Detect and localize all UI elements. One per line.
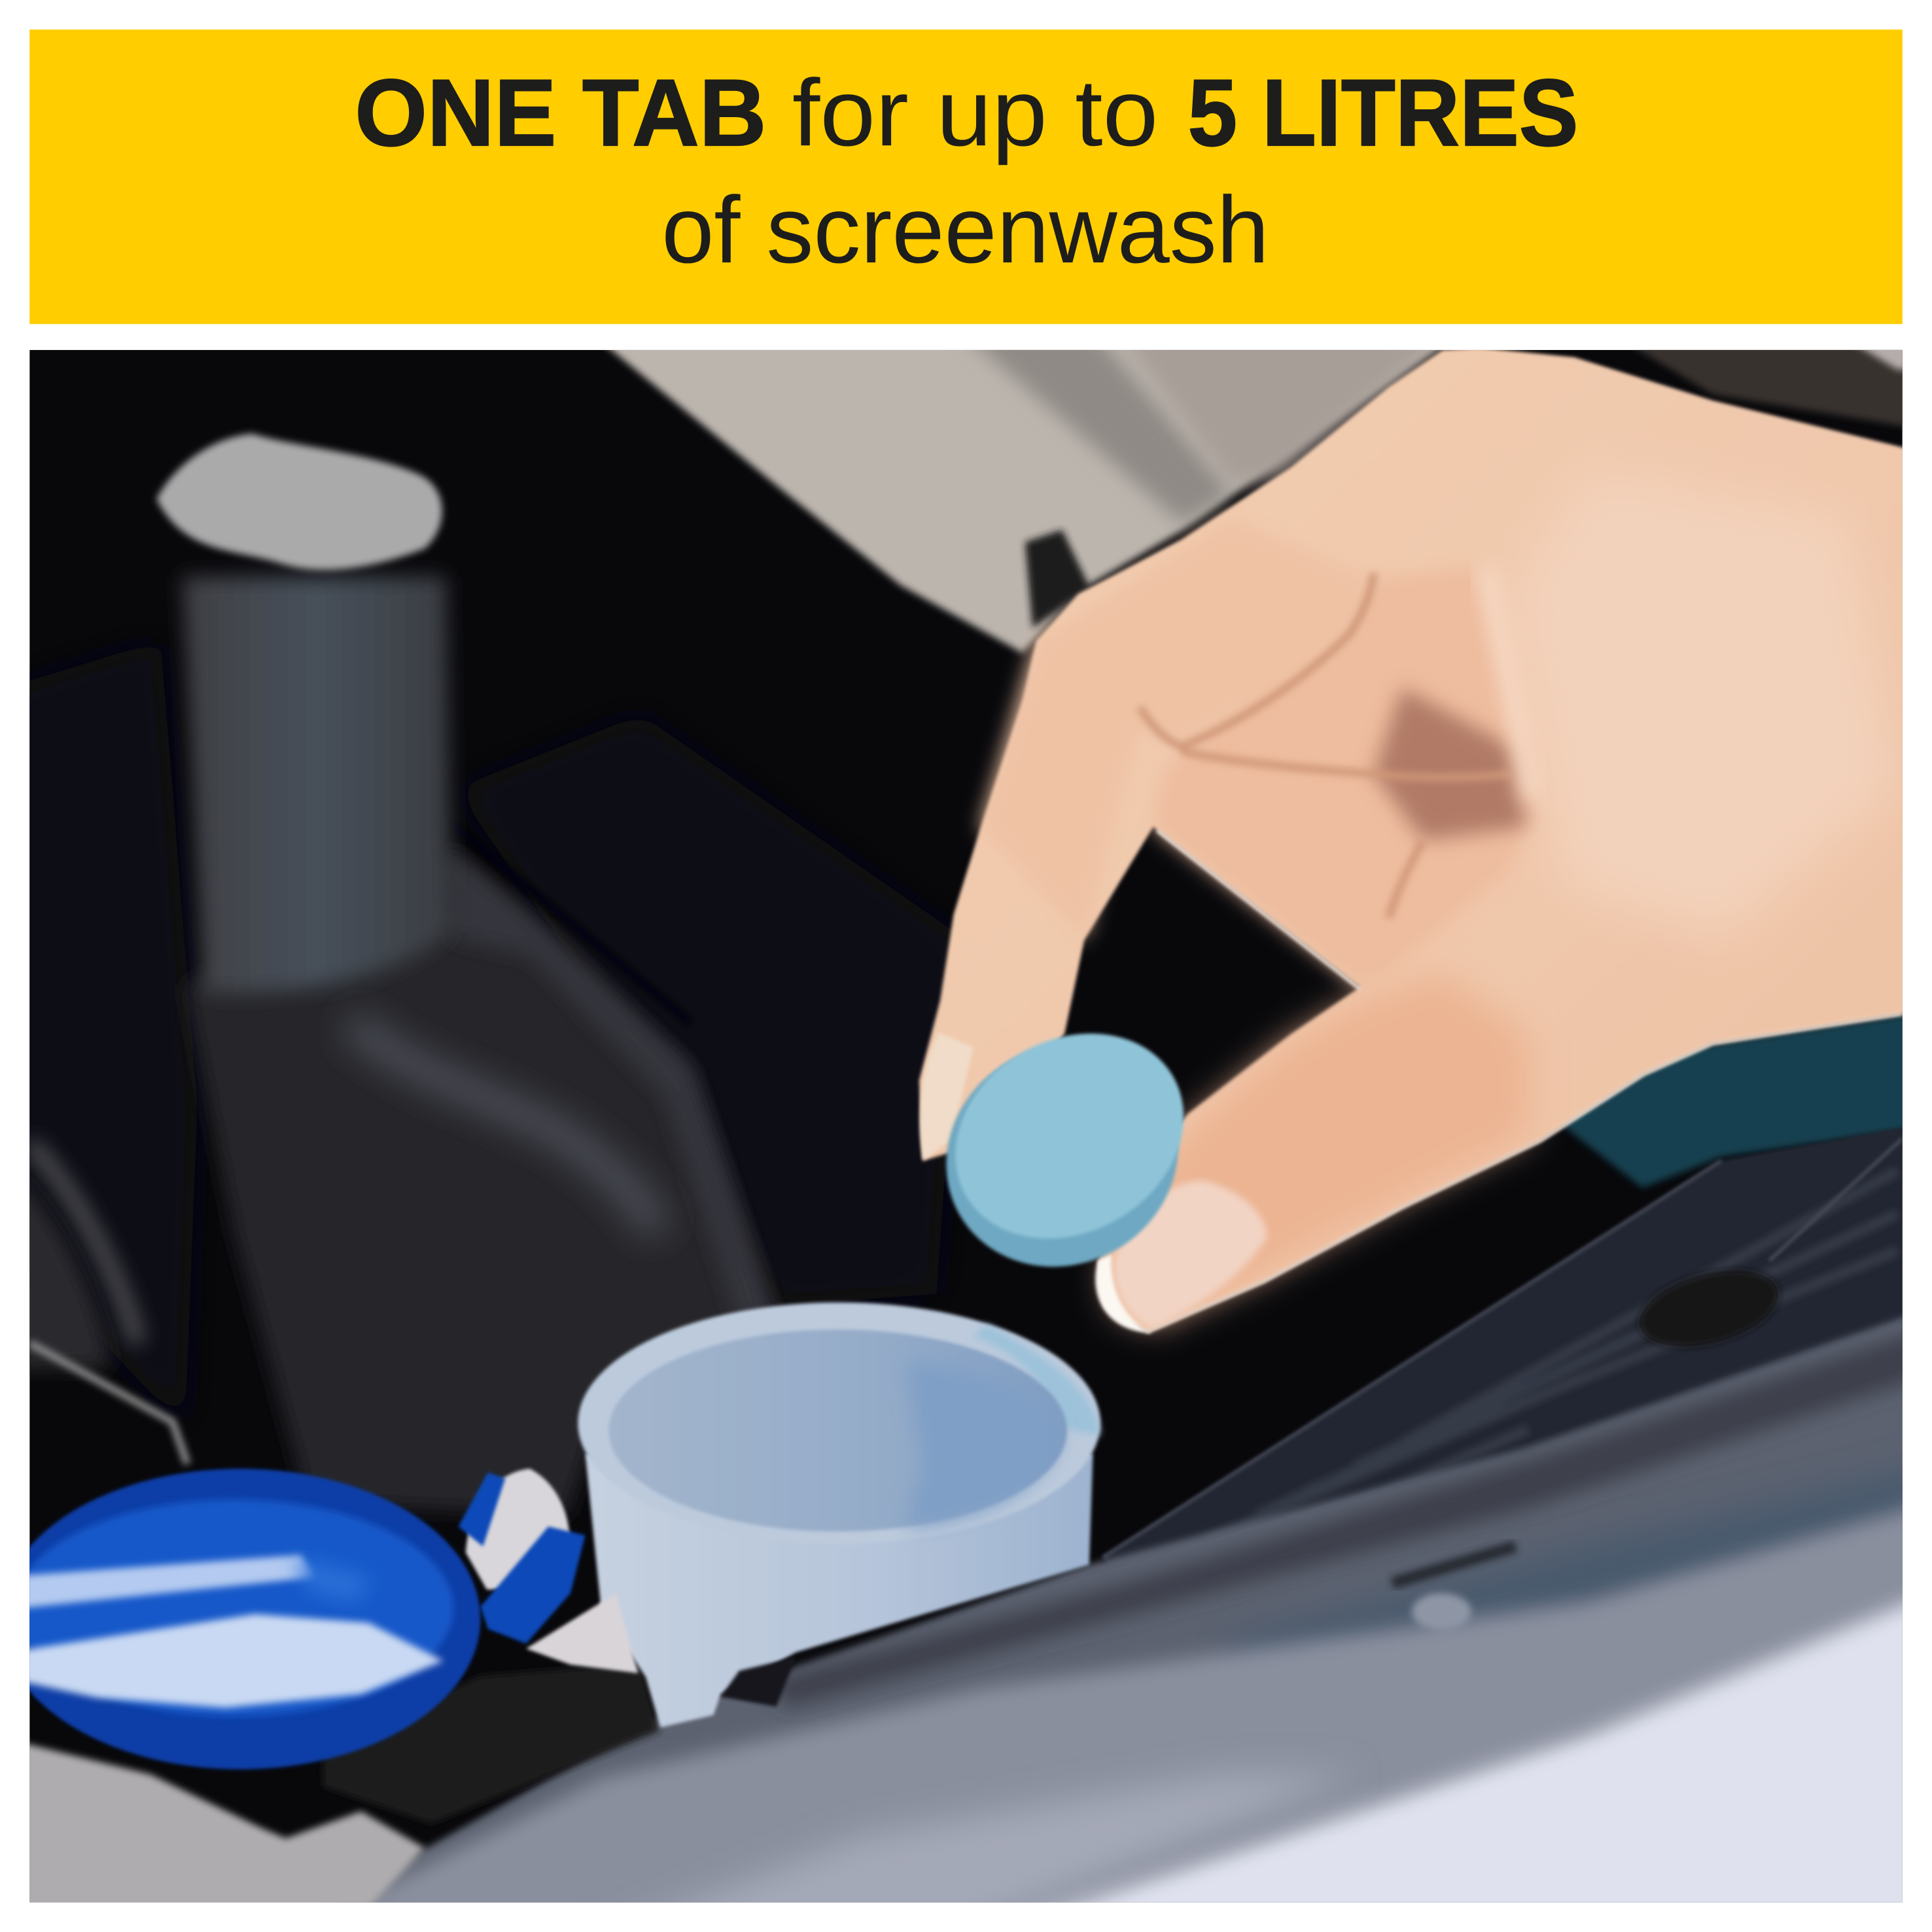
car bodywork [209, 1293, 1932, 1932]
curled fingers [1153, 567, 1533, 987]
inner pocket shadow [1374, 688, 1526, 840]
thumb tone [1109, 974, 1528, 1325]
foam in cap [0, 1614, 444, 1708]
dark plastic shapes left [0, 641, 961, 1464]
black grille under cap [323, 1663, 659, 1823]
index finger overlay [981, 518, 1374, 940]
blue cap [0, 1469, 586, 1769]
engine bay light background [575, 321, 1932, 653]
teal panel behind hand [1562, 1011, 1903, 1191]
index fingernail [920, 1032, 974, 1161]
washer filler cup [578, 1303, 1100, 1727]
subheading: of screenwash: of screenwash [661, 177, 1269, 283]
hinge strap [466, 1469, 639, 1674]
white filler cap [156, 434, 442, 570]
heading: for up to: for up to [792, 60, 1158, 166]
reservoir neck [183, 576, 451, 992]
debris bottom left [0, 1737, 425, 1932]
thumbnail [1114, 1180, 1267, 1328]
dark grille [1100, 1127, 1903, 1562]
heading: 5 litres: 5 LITRES [1187, 60, 1578, 166]
reservoir body [184, 823, 776, 1515]
crease lines [1140, 573, 1512, 918]
heading: one tab: ONE TAB [355, 60, 766, 166]
liquid inside cup [608, 1329, 1067, 1532]
banner: yellow headline panel [29, 29, 1903, 324]
hand [919, 347, 1932, 1333]
back of hand highlight [1509, 468, 1897, 936]
tablet [905, 993, 1221, 1308]
